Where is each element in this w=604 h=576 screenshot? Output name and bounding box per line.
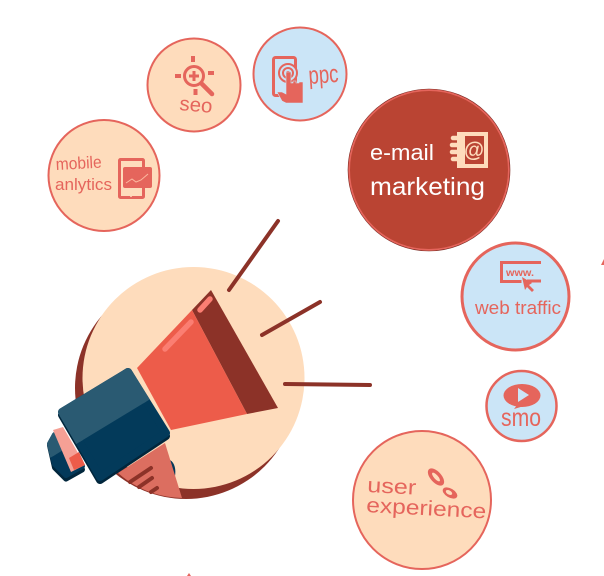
backdrop circles xyxy=(75,267,304,499)
label: ppc: ppc xyxy=(307,60,339,90)
label: smo: smo xyxy=(501,404,541,432)
circle: web traffic xyxy=(462,243,569,350)
rear cap xyxy=(50,427,85,478)
sound lines xyxy=(229,221,370,385)
label: mobile analytics: anlytics xyxy=(55,175,112,194)
circle: user experience xyxy=(353,431,491,569)
icon: tablet touch xyxy=(274,58,303,103)
body xyxy=(62,372,166,480)
icon: paintbrush mask xyxy=(425,466,459,501)
label: mobile analytics: mobile xyxy=(55,153,102,174)
icon: tablet chart xyxy=(120,160,152,198)
circle: seo xyxy=(148,38,240,132)
label: user experience: experience xyxy=(366,494,487,523)
label: mobile analytics xyxy=(55,153,112,194)
label: e-mail marketing xyxy=(370,140,485,201)
label: e-mail marketing: e-mail xyxy=(370,140,434,165)
stray marks xyxy=(187,259,604,576)
icon: address book: @ xyxy=(464,139,484,162)
icon: address book xyxy=(452,132,488,168)
handle button xyxy=(164,460,175,478)
icon: magnifier xyxy=(175,56,214,95)
circle: ppc xyxy=(254,28,346,120)
icon: video bubble xyxy=(504,384,540,409)
circle: e-mail marketing xyxy=(348,89,510,251)
circle: mobile analytics xyxy=(48,120,160,231)
handle xyxy=(118,443,182,498)
label: user experience: user xyxy=(367,474,417,500)
megaphone illustration xyxy=(50,221,370,499)
icon: www cursor: www. xyxy=(505,268,534,279)
label: user experience xyxy=(366,474,487,523)
label: e-mail marketing: marketing xyxy=(370,173,485,201)
circle: smo xyxy=(486,371,556,441)
label: seo: seo xyxy=(179,93,213,118)
cone xyxy=(137,290,278,430)
label: web traffic: web traffic xyxy=(474,298,561,318)
